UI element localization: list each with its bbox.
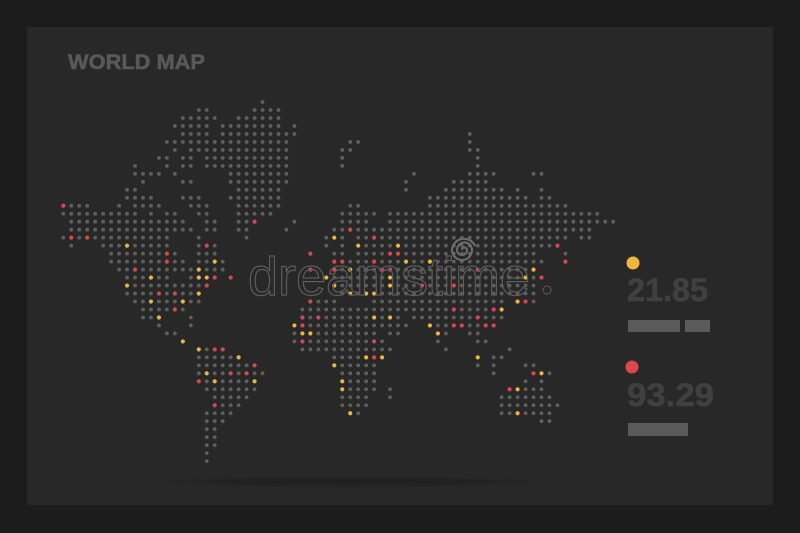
yellow value: 21.85 [627, 272, 708, 308]
dotted world map [63, 102, 614, 461]
yellow data dots [127, 238, 542, 413]
gray land dots [63, 102, 614, 461]
legend: yellow series [626, 256, 710, 332]
red data dots [63, 206, 566, 405]
red marker [626, 360, 638, 374]
red value: 93.29 [627, 377, 714, 413]
title: WORLD MAP [68, 51, 205, 74]
ground shadow [150, 476, 550, 488]
yellow label bars [628, 320, 710, 332]
watermark: dreamstime [248, 247, 530, 307]
yellow marker [626, 256, 640, 270]
legend: red series [626, 360, 714, 436]
red label bar [628, 423, 688, 436]
